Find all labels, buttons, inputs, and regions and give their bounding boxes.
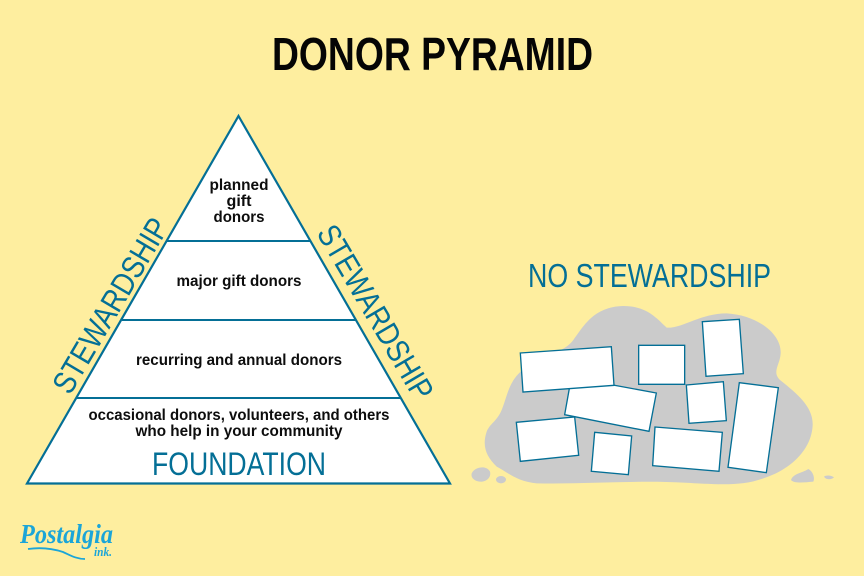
title: DONOR PYRAMID [272,28,593,80]
pyramid [27,116,450,484]
tier: occasional donors [88,407,390,440]
tier: planned gift donors [210,177,268,226]
tier: occasional donors: who help in your community [135,423,343,440]
left stewardship label: STEWARDSHIP [45,212,176,400]
tier: planned gift donors: donors [214,209,265,226]
logo: Postalgia [19,519,113,549]
tier: planned gift donors: planned [210,177,268,194]
logo [19,519,113,559]
logo: ink. [94,544,112,559]
tier: recurring and annual donors: recurring and annual donors [136,352,342,369]
tier: planned gift donors: gift [226,193,252,210]
gray blob [485,306,813,484]
right stewardship label: STEWARDSHIP [310,218,441,406]
tier: major gift donors: major gift donors [176,273,302,290]
rubble pile [472,306,834,484]
foundation label: FOUNDATION [152,446,326,482]
gray pebbles [472,467,834,483]
no stewardship heading: NO STEWARDSHIP [528,257,771,294]
tier: occasional donors: occasional donors, volunteers, and others [88,407,390,424]
scattered blocks [516,319,778,475]
